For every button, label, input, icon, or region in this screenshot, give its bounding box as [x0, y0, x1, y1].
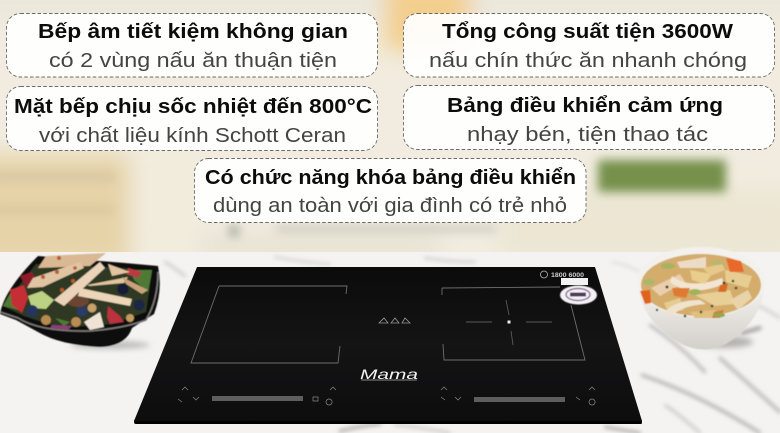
callout: total power: [404, 14, 774, 77]
round warranty sticker: [560, 286, 597, 304]
callout: recessed hob: có 2 vùng nấu ăn thuận tiện: [49, 50, 337, 72]
callout: touch panel: nhạy bén, tiện thao tác: [467, 124, 708, 146]
callout: touch panel: [404, 86, 774, 150]
soup bowl shadow: [697, 336, 753, 348]
brand logo: [360, 366, 418, 382]
callout: recessed hob: Bếp âm tiết kiệm không gian: [38, 21, 348, 43]
warning triangle icons: [379, 318, 410, 323]
bowl rim: [637, 247, 765, 317]
cooktop glass surface: [134, 267, 642, 421]
callout: total power: nấu chín thức ăn nhanh chóng: [429, 50, 747, 72]
salad bowl: [0, 253, 160, 349]
right cooking zone: [442, 287, 585, 360]
brand logo: Mama: [360, 366, 418, 382]
right slider: [474, 397, 565, 402]
left slider: [212, 396, 303, 401]
callout: touch panel: Bảng điều khiển cảm ứng: [447, 95, 723, 117]
berries and toppings: [10, 268, 144, 330]
dark bowl body: [0, 256, 160, 347]
soup ingredients: [640, 257, 752, 318]
hotline badge: 1800 6000: [551, 273, 585, 279]
right zone crosshair: [466, 300, 552, 345]
left touch controls: [178, 387, 336, 405]
induction cooktop: [134, 267, 642, 424]
white label sticker: [561, 278, 588, 285]
salad base: [3, 264, 152, 328]
white bowl body: [637, 282, 765, 350]
callout: panel lock: Có chức năng khóa bảng điều khiển: [205, 167, 576, 189]
callout: panel lock: dùng an toàn với gia đình có trẻ nhỏ: [213, 195, 567, 217]
soup surface: [641, 254, 761, 316]
callout: total power: Tổng công suất tiện 3600W: [442, 21, 733, 43]
bowl shadow: [70, 341, 150, 349]
salad greens: [3, 270, 152, 326]
bowl rim: [0, 272, 158, 331]
blurred kitchen background: [0, 0, 780, 265]
grilled chicken strips: [27, 253, 148, 306]
callout: heat resistance: [6, 86, 378, 150]
right touch controls: [441, 387, 595, 405]
marble countertop: [0, 252, 780, 433]
hotline badge: [540, 271, 585, 279]
left cooking zone: [191, 286, 347, 363]
callout: panel lock: [194, 158, 586, 222]
callout: heat resistance: với chất liệu kính Schott Ceran: [39, 125, 346, 147]
callout: heat resistance: Mặt bếp chịu sốc nhiệt đến 800°C: [14, 96, 372, 118]
callout: recessed hob: [6, 14, 378, 77]
cooktop edge: [134, 420, 642, 424]
soup bowl: [637, 247, 765, 350]
